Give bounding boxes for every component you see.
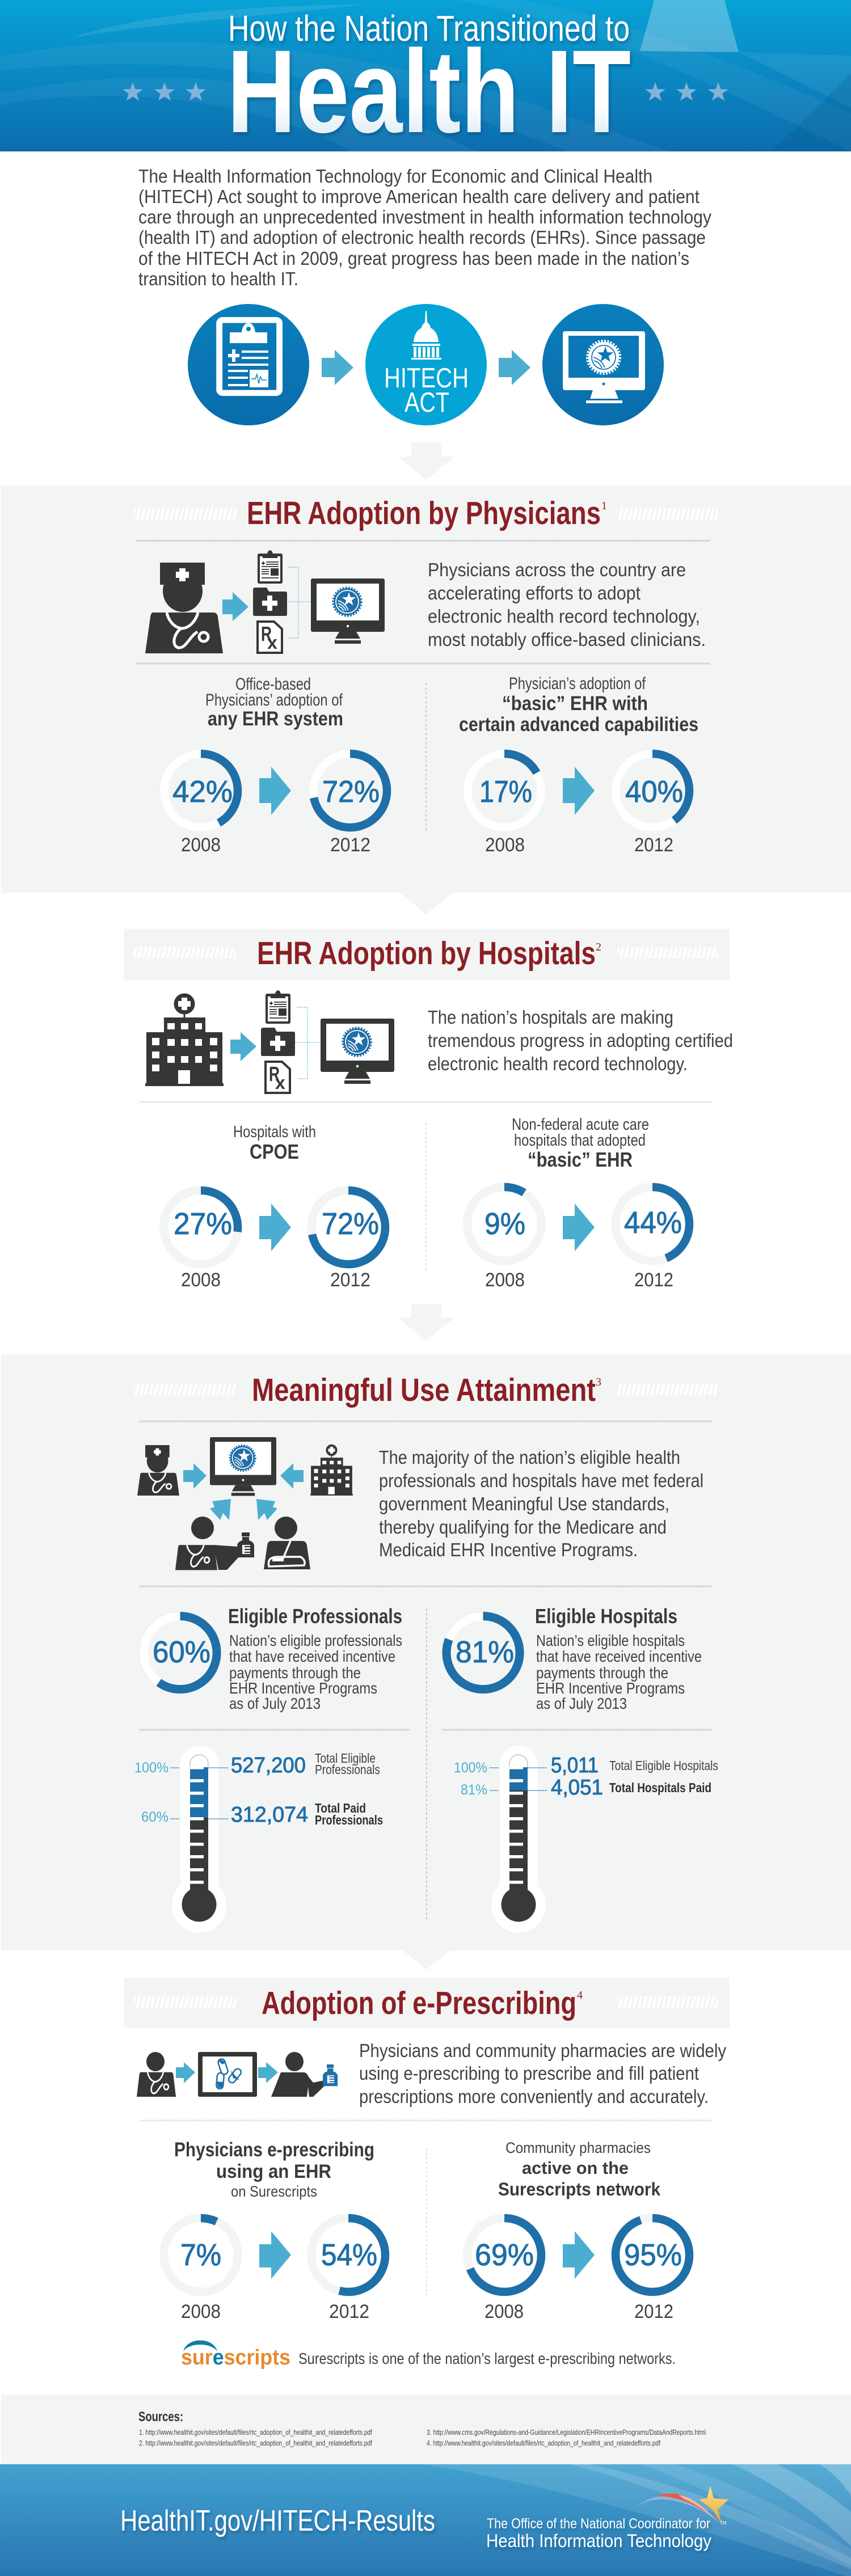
subhead left: any EHR system <box>208 708 343 730</box>
surescripts note: Surescripts is one of the nation’s largest e-prescribing networks. <box>298 2350 676 2367</box>
icon: Rx document <box>258 622 282 653</box>
donut: 7% 2008 <box>160 2214 242 2322</box>
donut: 95% 2012 <box>612 2214 693 2322</box>
subhead right: active on the <box>522 2158 629 2178</box>
icon: tablet with pills <box>198 2052 257 2097</box>
heading band <box>124 1978 730 2028</box>
donut: 17% 2008: 17% <box>479 775 532 809</box>
down arrow <box>398 442 455 480</box>
donut: 72% 2012 <box>307 1186 389 1291</box>
donut: 60% <box>140 1612 221 1694</box>
eligible professionals text: EHR Incentive Programs <box>229 1679 377 1697</box>
icon: Rx document: R <box>269 1062 280 1086</box>
icon: pharmacist with bottle <box>175 1517 254 1570</box>
donut: 9% 2008 <box>464 1183 545 1291</box>
donut: 60%: 60% <box>153 1635 210 1669</box>
heading hatch left <box>134 947 236 958</box>
donut: 72% 2012: 72% <box>322 775 380 809</box>
description <box>428 559 706 650</box>
ONC logo mark <box>637 2486 728 2526</box>
panel: meaningful use attainment <box>1 1354 851 1970</box>
arrow <box>563 1203 595 1251</box>
527,200 value: 527,200 <box>231 1754 306 1777</box>
icon: doctor <box>145 563 223 653</box>
subhead left <box>174 2139 374 2200</box>
donut: 40% 2012: 40% <box>625 775 683 809</box>
description: Physicians and community pharmacies are widely <box>359 2040 726 2061</box>
intro text: (health IT) and adoption of electronic health records (EHRs). Since passage <box>138 227 706 248</box>
total paid professionals <box>315 1801 383 1827</box>
title line: How the Nation Transitioned to <box>228 8 630 49</box>
footnote 2: 2 <box>596 941 601 953</box>
subhead left <box>233 1123 316 1163</box>
icon: doctor <box>137 2052 176 2097</box>
icon: clipboard <box>266 990 290 1024</box>
subhead right <box>498 2139 660 2199</box>
subhead right: certain advanced capabilities <box>459 713 698 736</box>
thermometer: professionals <box>134 1746 383 1933</box>
panel: sources <box>1 2395 851 2464</box>
donut: 27% 2008: 2008 <box>181 1269 221 1291</box>
heading hatch right <box>617 1384 718 1395</box>
heading hatch left <box>134 1996 236 2008</box>
icon: monitor <box>210 1437 276 1496</box>
heading hatch right <box>617 947 718 958</box>
source 2: 2. http://www.healthit.gov/sites/default/files/rtc_adoption_of_healthit_and_relatedefforts.pdf <box>139 2439 372 2447</box>
subhead left: CPOE <box>250 1140 299 1163</box>
eligible professionals text: Eligible Professionals <box>228 1604 402 1628</box>
subhead right: hospitals that adopted <box>514 1131 646 1150</box>
description: tremendous progress in adopting certified <box>428 1030 733 1051</box>
ONC logo mark: TM <box>720 2520 727 2526</box>
donut: 17% 2008 <box>464 750 545 856</box>
eligible professionals text: payments through the <box>229 1664 361 1682</box>
donut: 27% 2008: 27% <box>174 1207 232 1241</box>
footnote 3: 3 <box>596 1376 601 1388</box>
5,011 value: 5,011 <box>551 1754 599 1777</box>
eligible hospitals text: that have received incentive <box>536 1648 702 1665</box>
arrow <box>259 2231 291 2279</box>
subhead left: using an EHR <box>216 2161 331 2182</box>
icon: clipboard in circle <box>188 304 309 425</box>
icon: Rx document <box>266 1062 290 1093</box>
icon: Rx document: x <box>275 1072 285 1093</box>
source 4: 4. http://www.healthit.gov/sites/default/files/rtc_adoption_of_healthit_and_relatedefforts.pdf <box>427 2439 660 2447</box>
total eligible hospitals: Total Eligible Hospitals <box>609 1758 718 1773</box>
donut: 54% 2012 <box>307 2214 389 2322</box>
total eligible professionals <box>315 1751 380 1777</box>
donut: 7% 2008: 2008 <box>181 2301 221 2322</box>
website: HealthIT.gov/HITECH-Results <box>120 2505 435 2537</box>
donut: 44% 2012 <box>612 1183 693 1291</box>
intro text: (HITECH) Act sought to improve American health care delivery and patient <box>138 186 700 207</box>
subhead right <box>459 674 698 736</box>
donut: 81%: 81% <box>456 1635 514 1669</box>
subhead right <box>512 1116 649 1171</box>
description <box>379 1447 703 1560</box>
donut: 95% 2012: 2012 <box>634 2301 673 2322</box>
intro text: care through an unprecedented investment in health information technology <box>138 206 711 227</box>
sources heading: Sources: <box>138 2409 183 2425</box>
donut: 42% 2008: 42% <box>172 775 233 809</box>
total paid professionals: Professionals <box>315 1813 383 1827</box>
icon: monitor <box>311 578 385 644</box>
donut: 95% 2012: 95% <box>624 2238 682 2272</box>
donut: 40% 2012: 2012 <box>634 834 673 856</box>
heading band <box>124 929 730 980</box>
description: most notably office-based clinicians. <box>428 629 706 650</box>
donut: 69% 2008 <box>464 2214 545 2322</box>
100% label: 100% <box>134 1760 168 1776</box>
stars right <box>645 82 728 101</box>
donut: 42% 2008 <box>160 750 242 856</box>
icon: folder with cross <box>261 1028 295 1056</box>
eligible hospitals text: as of July 2013 <box>536 1695 627 1712</box>
total paid professionals: Total Paid <box>315 1801 366 1815</box>
eligible professionals text: as of July 2013 <box>229 1695 321 1712</box>
description: electronic health record technology. <box>428 1053 688 1074</box>
arrow up-left <box>210 1499 231 1520</box>
arrow <box>563 767 595 815</box>
description: accelerating efforts to adopt <box>428 582 641 603</box>
description: professionals and hospitals have met federal <box>379 1470 703 1491</box>
total eligible professionals: Total Eligible <box>315 1751 376 1766</box>
4,051 value: 4,051 <box>551 1776 603 1800</box>
subhead right: “basic” EHR with <box>502 692 648 715</box>
eligible hospitals text: Nation’s eligible hospitals <box>536 1632 685 1649</box>
60% label: 60% <box>141 1809 168 1825</box>
arrow <box>563 2231 595 2279</box>
surescripts logo: surescripts <box>181 2346 290 2370</box>
eligible professionals text: that have received incentive <box>229 1648 395 1665</box>
arrow <box>176 2062 195 2083</box>
eligible hospitals text: payments through the <box>536 1664 668 1682</box>
subhead left: Hospitals with <box>233 1123 316 1141</box>
description: electronic health record technology, <box>428 606 700 627</box>
section: adoption of e-prescribing <box>124 1978 730 2370</box>
icon: hospital <box>310 1445 353 1496</box>
ACT label: ACT <box>405 387 449 418</box>
icon: clipboard <box>258 550 283 584</box>
description <box>359 2040 726 2107</box>
source 1: 1. http://www.healthit.gov/sites/default/files/rtc_adoption_of_healthit_and_relatedefforts.pdf <box>139 2428 372 2436</box>
description: thereby qualifying for the Medicare and <box>379 1517 667 1538</box>
header banner <box>0 0 851 158</box>
source 3: 3. http://www.cms.gov/Regulations-and-Guidance/Legislation/EHRIncentivePrograms/DataAndReports.html <box>427 2428 706 2436</box>
heading hatch left <box>134 1384 236 1395</box>
heading: EHR Adoption by Physicians <box>247 495 601 531</box>
total eligible professionals: Professionals <box>315 1762 380 1777</box>
subhead right: “basic” EHR <box>528 1148 633 1171</box>
footer banner <box>0 2464 851 2576</box>
donut: 72% 2012 <box>309 750 391 856</box>
icon: patient with sling <box>264 1517 310 1569</box>
donut: 72% 2012: 72% <box>322 1207 379 1241</box>
capitol dome <box>411 311 441 360</box>
subhead right: Surescripts network <box>498 2179 660 2199</box>
footnote 4: 4 <box>577 1989 583 2001</box>
intro text: of the HITECH Act in 2009, great progress has been made in the nation’s <box>138 248 689 269</box>
donut: 69% 2008: 69% <box>475 2238 534 2272</box>
arrow <box>259 767 291 815</box>
donut: 44% 2012: 44% <box>624 1206 682 1240</box>
subhead left: Office-based <box>235 675 311 694</box>
donut: 69% 2008: 2008 <box>485 2301 524 2322</box>
arrow <box>230 1032 256 1061</box>
donut: 72% 2012: 2012 <box>330 834 370 856</box>
title: Health IT: Health IT <box>227 26 631 158</box>
subhead right: Physician’s adoption of <box>509 674 646 693</box>
description: prescriptions more conveniently and accurately. <box>359 2086 709 2107</box>
arrow up-right <box>256 1499 277 1520</box>
subhead left: on Surescripts <box>231 2183 317 2200</box>
description: The majority of the nation’s eligible health <box>379 1447 680 1468</box>
intro text: The Health Information Technology for Economic and Clinical Health <box>138 166 652 187</box>
donut: 44% 2012: 2012 <box>634 1269 673 1291</box>
arrow <box>322 350 353 385</box>
icon: monitor <box>321 1019 394 1084</box>
donut: 81% <box>443 1612 524 1694</box>
intro text: transition to health IT. <box>138 268 298 289</box>
subhead left: Physicians’ adoption of <box>205 691 343 710</box>
icon: hospital <box>145 995 224 1086</box>
thermometer: hospitals <box>454 1746 718 1933</box>
eligible hospitals text <box>535 1604 702 1712</box>
heading: Adoption of e-Prescribing <box>262 1985 576 2021</box>
donut: 42% 2008: 2008 <box>181 834 221 856</box>
312,074 value: 312,074 <box>231 1803 308 1827</box>
subhead right: Community pharmacies <box>505 2139 651 2156</box>
HITECH label: HITECH <box>384 363 469 394</box>
footnote 1: 1 <box>601 500 607 512</box>
donut: 7% 2008: 7% <box>180 2238 221 2272</box>
arrow <box>259 1203 291 1251</box>
eligible professionals text <box>228 1604 402 1712</box>
subhead left: Physicians e-prescribing <box>174 2139 374 2161</box>
stars left <box>123 82 206 101</box>
donut: 17% 2008: 2008 <box>485 834 525 856</box>
section: EHR adoption by hospitals <box>124 929 733 1291</box>
description: government Meaningful Use standards, <box>379 1493 669 1514</box>
icon: pharmacist with bottle <box>271 2052 338 2097</box>
100% label: 100% <box>454 1760 487 1776</box>
donut: 72% 2012: 2012 <box>330 1269 370 1291</box>
arrow <box>222 592 248 621</box>
arrow <box>183 1463 207 1489</box>
icon: HITECH Act capitol circle <box>365 304 487 425</box>
donut: 9% 2008: 2008 <box>485 1269 525 1291</box>
subhead right: Non-federal acute care <box>512 1116 649 1134</box>
description: Physicians across the country are <box>428 559 686 580</box>
intro text <box>138 166 711 289</box>
donut: 27% 2008 <box>160 1186 242 1291</box>
ONC line 1: The Office of the National Coordinator for <box>487 2516 710 2532</box>
heading hatch left <box>134 508 236 520</box>
description: The nation’s hospitals are making <box>428 1007 673 1028</box>
heading: Meaningful Use Attainment <box>252 1372 596 1408</box>
arrow <box>258 2062 278 2083</box>
icon: monitor in circle <box>542 304 664 425</box>
donut: 40% 2012 <box>612 750 693 856</box>
eligible professionals text: Nation’s eligible professionals <box>229 1632 402 1649</box>
ONC line 2: Health Information Technology <box>486 2531 711 2551</box>
eligible hospitals text: Eligible Hospitals <box>535 1604 677 1628</box>
icon: folder with cross <box>253 588 287 616</box>
arrow <box>499 350 530 385</box>
down arrow <box>398 1304 455 1341</box>
arrow <box>280 1463 304 1489</box>
icon: doctor <box>137 1445 179 1496</box>
subhead left <box>205 675 343 730</box>
icon: Rx document: R <box>261 622 272 645</box>
description: Medicaid EHR Incentive Programs. <box>379 1539 638 1560</box>
heading hatch right <box>617 508 718 520</box>
donut: 54% 2012: 2012 <box>329 2301 369 2322</box>
donut: 9% 2008: 9% <box>485 1207 525 1241</box>
donut: 54% 2012: 54% <box>321 2238 377 2272</box>
81% label: 81% <box>461 1782 487 1798</box>
heading: EHR Adoption by Hospitals <box>257 935 596 972</box>
total hospitals paid: Total Hospitals Paid <box>609 1780 711 1795</box>
description: using e-prescribing to prescribe and fill patient <box>359 2063 699 2084</box>
panel: EHR adoption by physicians <box>1 485 851 914</box>
heading hatch right <box>617 1996 718 2008</box>
description <box>428 1007 733 1074</box>
eligible hospitals text: EHR Incentive Programs <box>536 1679 685 1697</box>
icon: Rx document: x <box>267 632 277 653</box>
